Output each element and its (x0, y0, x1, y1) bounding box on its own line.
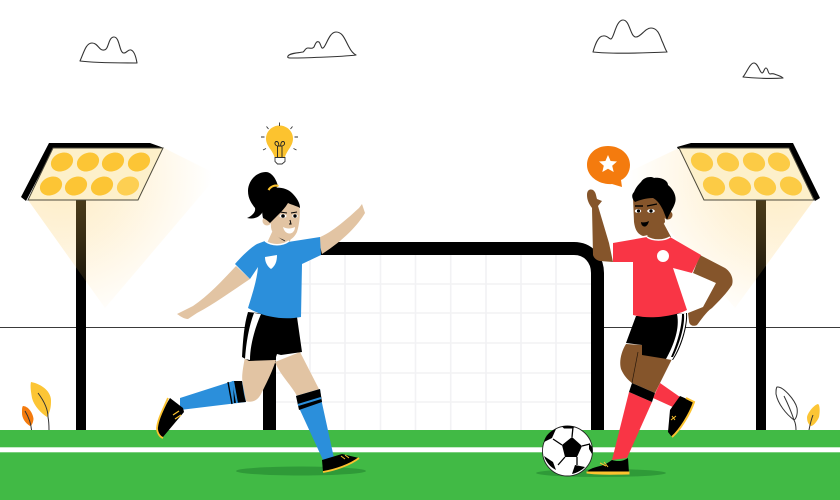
back sock (180, 381, 246, 410)
speech bubble with star (587, 146, 630, 187)
right floodlight pole (756, 198, 766, 431)
front shoe (322, 454, 359, 472)
shirt (235, 237, 321, 318)
plants left (22, 382, 51, 430)
hair (632, 177, 676, 220)
back leg (242, 357, 276, 402)
neck (267, 230, 292, 246)
face (633, 196, 665, 236)
back shoe (668, 396, 694, 437)
grass field (0, 430, 840, 500)
clouds (80, 20, 783, 78)
left arm (177, 266, 250, 319)
left player: blue kit (157, 172, 365, 472)
goal (270, 248, 598, 431)
left player shadow (236, 466, 366, 476)
soccer ball (542, 426, 592, 476)
white field line (0, 447, 840, 452)
smile (283, 227, 295, 234)
back leg (653, 383, 680, 408)
face (271, 201, 300, 240)
plants right (776, 387, 820, 430)
hair tie (268, 186, 278, 190)
ear (664, 210, 672, 220)
goal frame (270, 248, 598, 431)
front sock (612, 392, 652, 460)
shorts (242, 312, 302, 361)
shirt crest (265, 255, 277, 269)
lightbulb icon (261, 122, 298, 164)
front shoe (587, 458, 629, 473)
shirt badge (657, 250, 669, 262)
front leg (275, 352, 320, 396)
shorts (626, 313, 687, 360)
right arm (318, 204, 365, 254)
hair with ponytail (262, 188, 300, 223)
shirt (613, 237, 701, 317)
right floodlight head (677, 143, 820, 201)
front sock (296, 389, 334, 460)
right player shadow (536, 469, 666, 477)
eyes and brows (635, 204, 657, 213)
raised arm (587, 190, 613, 262)
right floodlight beam (622, 148, 814, 308)
eyes and brows (280, 212, 298, 224)
thigh and knee (620, 344, 672, 393)
knee band (629, 383, 655, 402)
goal net (270, 250, 597, 431)
right player: red kit (587, 177, 733, 474)
bent arm (688, 255, 733, 326)
ear (262, 216, 272, 226)
left floodlight head (21, 143, 164, 201)
left floodlight beam (28, 148, 218, 308)
left floodlight pole (76, 198, 86, 431)
horizon line (0, 326, 840, 328)
neck (647, 224, 671, 241)
mouth (641, 221, 649, 227)
back shoe (157, 398, 184, 437)
